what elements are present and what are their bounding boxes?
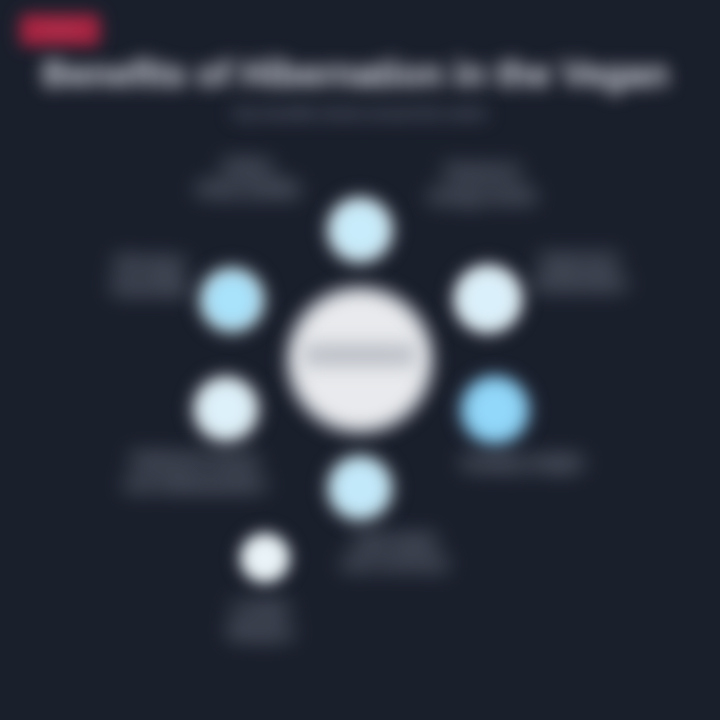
label: top right xyxy=(424,155,541,215)
label: bottom: Cell repair xyxy=(353,531,437,550)
label: left xyxy=(105,247,193,305)
label: lower left: and inflammation xyxy=(125,474,265,493)
label: top left: sleep quality xyxy=(196,179,299,198)
label: top left: Better xyxy=(223,157,273,176)
label: bottom: and recovery xyxy=(342,553,448,572)
node: lower right xyxy=(450,365,540,455)
label: top right: Restored xyxy=(445,162,519,181)
label: right: metabolism xyxy=(532,273,626,292)
title: Benefits of Hibernation in the Vegan xyxy=(42,53,669,94)
label: bottom xyxy=(337,524,453,580)
label: left: Stronger xyxy=(115,254,185,273)
label: right: Improved xyxy=(541,251,617,270)
node: bottom xyxy=(316,444,404,532)
label: right xyxy=(528,244,632,300)
label: lower left xyxy=(120,443,270,502)
label: lowest: lifespan xyxy=(229,622,293,641)
central hub circle xyxy=(274,274,446,446)
node: top xyxy=(316,186,404,274)
label: lowest xyxy=(221,592,298,650)
node: lower left xyxy=(182,365,270,453)
hub label xyxy=(304,344,416,366)
label: top left xyxy=(192,150,305,207)
hub disc xyxy=(276,276,444,444)
node: lowest xyxy=(230,523,300,593)
badge: red tag: NEW xyxy=(42,21,78,38)
label: lowest: Longer xyxy=(232,598,290,617)
subtitle: Key benefits shown around the centre xyxy=(233,105,487,121)
node: upper right xyxy=(443,254,533,344)
label: lower right: Healthy weight xyxy=(462,453,582,472)
label: left: immunity xyxy=(112,277,188,296)
hub label: Benefits xyxy=(332,347,388,363)
badge: red tag xyxy=(20,14,100,46)
node: upper left xyxy=(188,256,276,344)
label: top right: energy levels xyxy=(428,186,536,205)
label: lower left: Reduced stress xyxy=(132,450,258,469)
